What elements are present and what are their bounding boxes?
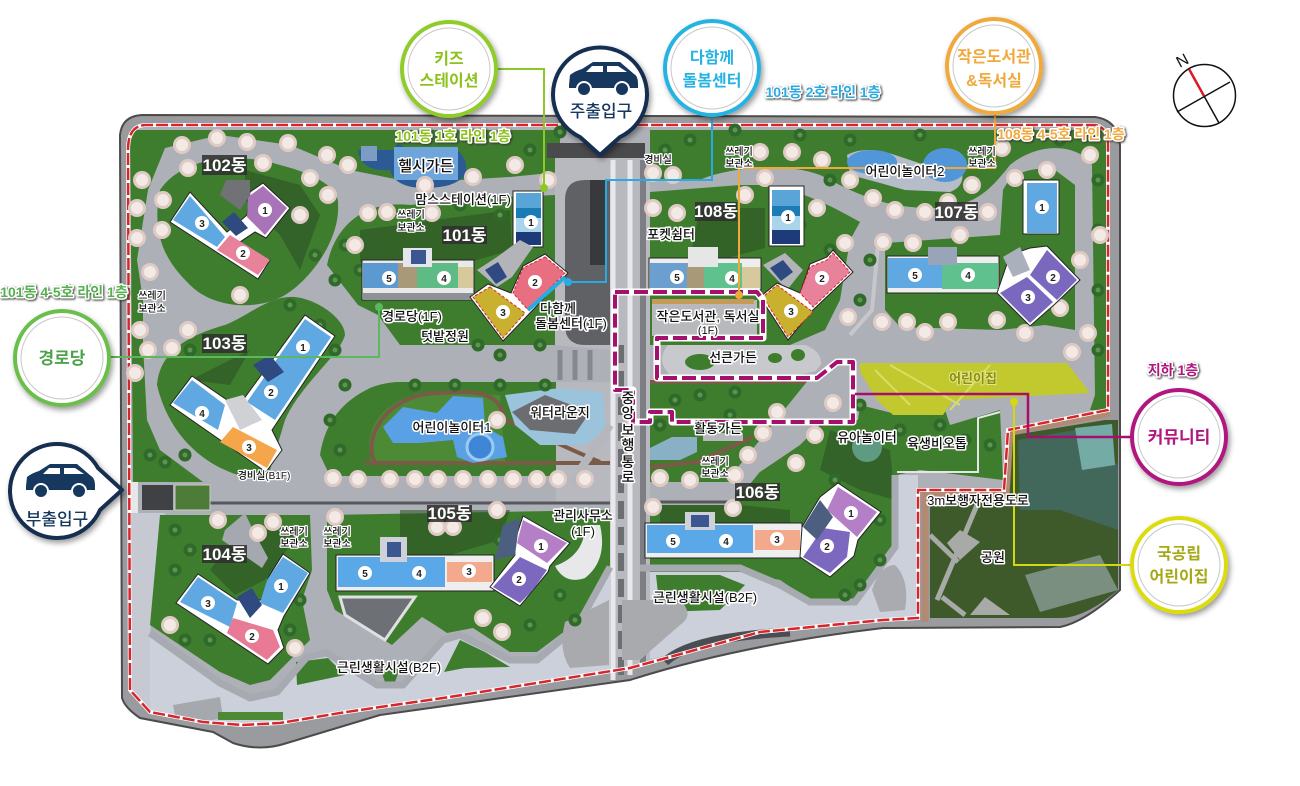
central walkway — [547, 143, 650, 680]
vertical walkway label: 중 — [622, 390, 635, 406]
central garden path — [650, 382, 812, 467]
connector: daycare — [1011, 399, 1132, 565]
building 105: 1 — [538, 542, 544, 553]
building 103 — [170, 315, 335, 472]
entry lawn — [175, 485, 210, 510]
brown promenade — [925, 413, 1110, 622]
building number tags: 105동 — [427, 504, 472, 523]
building 104: 3 — [205, 599, 211, 610]
map labels: 헬시가든 — [398, 158, 454, 175]
map labels: 맘스스테이션(1F) — [415, 192, 511, 207]
building 106: 1 — [848, 509, 854, 520]
building 108: 2 — [819, 274, 825, 285]
lawns — [130, 130, 1108, 685]
map labels: 어린이놀이터2 — [866, 164, 944, 179]
sunken garden — [662, 345, 821, 375]
building number tags: 102동 — [202, 156, 247, 175]
building 106: 5 — [670, 537, 676, 548]
glass roof grid — [590, 180, 607, 265]
building number tags: 106동 — [735, 483, 780, 502]
callout: community: 커뮤니티 — [1148, 428, 1210, 447]
building 101: 5 — [386, 274, 392, 285]
callout: main entrance pin — [553, 47, 647, 155]
callout: small library: &독서실 — [966, 72, 1022, 90]
building number tags: 103동 — [202, 334, 247, 353]
secondary entry crosswalk — [128, 482, 138, 513]
building 108 — [649, 186, 853, 340]
building 101 — [362, 191, 568, 341]
building 105: 2 — [516, 575, 522, 586]
map labels: 쓰레기 — [323, 526, 351, 538]
garden court — [394, 147, 458, 180]
map labels: 작은도서관, 독서실 — [657, 309, 759, 324]
map labels: 근린생활시설(B2F) — [337, 660, 441, 675]
water lounge — [505, 388, 606, 445]
building 107: 2 — [1050, 273, 1056, 284]
site plan map — [120, 115, 1120, 748]
map labels: 활동가든 — [694, 421, 742, 436]
building 103: 1 — [300, 343, 306, 354]
building 102: 1 — [262, 206, 268, 217]
building 107: 1 — [1039, 203, 1045, 214]
SE gray lot — [622, 600, 688, 660]
playground inner lawn — [369, 392, 505, 462]
map labels: 보관소 — [725, 158, 753, 170]
map labels: 보관소 — [138, 303, 166, 315]
floor tag: basement: 지하 1층 — [1148, 362, 1198, 378]
aerial teal building — [1075, 424, 1115, 470]
vertical walkway label: 통 — [622, 454, 635, 470]
map labels: 선큰가든 — [709, 350, 757, 365]
callout: kids station: 스테이션 — [420, 72, 478, 90]
map labels: 쓰레기 — [968, 146, 996, 158]
brown path loop — [371, 392, 600, 462]
building 107: 3 — [1025, 293, 1031, 304]
map labels: 쓰레기 — [280, 526, 308, 538]
building number tags: 107동 — [934, 203, 979, 222]
vertical walkway label: 로 — [622, 469, 635, 485]
icon: car — [569, 62, 638, 96]
secondary entry road — [142, 485, 173, 510]
map labels: 경로당(1F) — [382, 309, 442, 324]
compass: N — [1174, 51, 1192, 72]
map labels: 3m보행자전용도로 — [927, 493, 1029, 508]
building 107: 5 — [912, 271, 918, 282]
community dashed outline — [615, 292, 853, 422]
building 105 — [336, 516, 570, 606]
connector: library — [736, 112, 995, 298]
map labels: 워터라운지 — [530, 405, 590, 420]
floor tag: 101 lines 4-5: 101동 4-5호 라인 1층 — [0, 284, 128, 300]
park — [930, 420, 1118, 618]
map labels: 보관소 — [701, 468, 729, 480]
building 105: 3 — [466, 567, 472, 578]
map labels: 쓰레기 — [725, 146, 753, 158]
map labels: 보관소 — [968, 158, 996, 170]
callout: small library — [947, 19, 1041, 113]
walkway stripes — [613, 160, 630, 680]
building 103: 4 — [199, 409, 205, 420]
aerial building shadow — [1018, 430, 1118, 530]
building 108: 4 — [729, 274, 735, 285]
green strip — [218, 712, 283, 720]
building 106: 2 — [824, 542, 830, 553]
callout: main entrance pin: 주출입구 — [570, 102, 632, 121]
dark wall along main road — [200, 502, 737, 503]
map labels: 쓰레기 — [138, 290, 166, 302]
site boundary — [128, 125, 1108, 725]
gray triangular court — [340, 597, 415, 640]
map labels: 다함께 — [540, 301, 576, 316]
building 102: 3 — [199, 219, 205, 230]
callout: senior hall — [15, 311, 109, 405]
callout: kids station: 키즈 — [434, 50, 464, 68]
connector: senior hall — [108, 304, 382, 357]
building 102: 2 — [240, 249, 246, 260]
callout: public daycare: 국공립 — [1157, 545, 1201, 563]
callout: public daycare: 어린이집 — [1150, 568, 1208, 586]
park plaza — [947, 530, 1010, 615]
building number tags: 108동 — [694, 202, 738, 221]
health garden — [358, 144, 466, 188]
callout: care center — [665, 21, 759, 115]
building 105: 4 — [416, 569, 422, 580]
map labels: 보관소 — [323, 538, 351, 550]
library strip — [652, 299, 754, 304]
building 102 — [170, 180, 290, 279]
central paved patch — [703, 433, 743, 441]
building 108: 3 — [788, 307, 794, 318]
diagonal garden path — [572, 425, 610, 482]
road surface — [128, 125, 1108, 725]
map labels: 돌봄센터(1F) — [535, 316, 607, 331]
map labels: 공원 — [981, 550, 1005, 565]
building 101: 4 — [441, 274, 447, 285]
connector: kids station — [496, 69, 547, 191]
callout: public daycare — [1132, 518, 1226, 612]
building 105: 5 — [362, 569, 368, 580]
entrance roof band — [547, 143, 645, 158]
building 104: 2 — [249, 632, 255, 643]
south curbs — [150, 475, 895, 698]
diagonal road — [738, 338, 855, 483]
building 103: 2 — [268, 388, 274, 399]
icon: car — [26, 464, 95, 498]
map labels: (1F) — [698, 325, 718, 337]
underground ramp roof — [565, 180, 610, 345]
building 104 — [176, 554, 310, 664]
map labels: 쓰레기 — [397, 209, 425, 221]
map labels: 경비실 — [644, 154, 672, 166]
building 106: 4 — [723, 537, 729, 548]
pool circle — [467, 434, 493, 460]
callout: community — [1132, 390, 1226, 484]
cherry blossom trees — [135, 138, 1100, 648]
dark trees — [150, 130, 1098, 640]
callout: secondary entrance pin — [10, 444, 122, 538]
building number tags: 104동 — [202, 545, 247, 564]
building 106 — [645, 483, 881, 577]
map labels — [138, 146, 1029, 675]
map labels: (1F) — [571, 524, 595, 539]
building 107 — [887, 180, 1080, 326]
garden pond — [358, 144, 466, 188]
building number tags: 101동 — [442, 226, 487, 245]
map labels: 포켓쉼터 — [647, 227, 695, 242]
callout: senior hall: 경로당 — [39, 349, 86, 368]
map labels: 유아놀이터 — [837, 430, 897, 445]
building 101: 3 — [500, 308, 506, 319]
SW gray lot — [562, 600, 609, 668]
compass — [1174, 51, 1236, 126]
building 108: 5 — [674, 273, 680, 284]
map labels: 쓰레기 — [701, 456, 729, 468]
104 access road — [222, 513, 268, 568]
building 108: 1 — [785, 213, 791, 224]
map labels: 어린이집 — [949, 371, 997, 386]
map labels: 보관소 — [280, 538, 308, 550]
building 107: 4 — [965, 271, 971, 282]
vertical walkway label: 앙 — [622, 405, 635, 421]
paved west strip — [132, 513, 165, 712]
map labels: 어린이놀이터1 — [412, 420, 492, 435]
callout: care center: 돌봄센터 — [683, 72, 741, 90]
vertical walkway label: 보 — [622, 422, 635, 438]
map labels: 육생비오톱 — [907, 436, 967, 451]
white community roof — [555, 525, 602, 580]
pool — [383, 396, 507, 463]
callout: kids station — [402, 22, 496, 116]
building 104: 1 — [278, 582, 284, 593]
floor tag: 101 line 1: 101동 1호 라인 1층 — [396, 128, 511, 144]
park lawn — [930, 420, 1118, 618]
garden grid — [361, 146, 377, 161]
right gray lot — [872, 565, 906, 612]
floor tag: 108 lines 4-5: 108동 4-5호 라인 1층 — [997, 126, 1125, 142]
building number tags — [202, 155, 979, 564]
library plaza — [652, 300, 757, 336]
playground 1 — [365, 392, 610, 463]
children's play court — [852, 432, 882, 462]
connector: care center — [565, 112, 712, 285]
callout: care center: 다함께 — [690, 49, 734, 67]
callout: secondary entrance pin: 부출입구 — [26, 510, 88, 529]
building 103: 3 — [246, 443, 252, 454]
connector: community — [855, 394, 1132, 437]
walkway base — [555, 158, 650, 672]
lawn shadows — [190, 170, 895, 595]
map labels: 근린생활시설(B2F) — [653, 590, 757, 605]
white garden path — [897, 412, 1000, 472]
map labels: 관리사무소 — [553, 508, 613, 523]
building 106: 3 — [774, 535, 780, 546]
vertical walkway label: 행 — [622, 437, 634, 453]
107 path — [850, 245, 878, 335]
aerial lower building — [1025, 555, 1118, 612]
gray pad — [173, 697, 223, 722]
building 101: 1 — [528, 218, 534, 229]
map labels: 경비실(B1F) — [238, 470, 290, 482]
map labels: 보관소 — [397, 222, 425, 234]
floor tag: 101 line 2: 101동 2호 라인 1층 — [766, 84, 881, 100]
building 101: 2 — [532, 278, 538, 289]
map labels: 텃밭정원 — [421, 329, 469, 344]
site base outline — [120, 115, 1120, 748]
daycare building — [860, 363, 1090, 415]
south service road — [665, 632, 790, 662]
park paths — [930, 505, 977, 615]
water garden — [650, 437, 697, 460]
paved south area — [150, 475, 918, 725]
playground 2 — [847, 148, 967, 192]
callout: small library: 작은도서관 — [957, 48, 1031, 66]
